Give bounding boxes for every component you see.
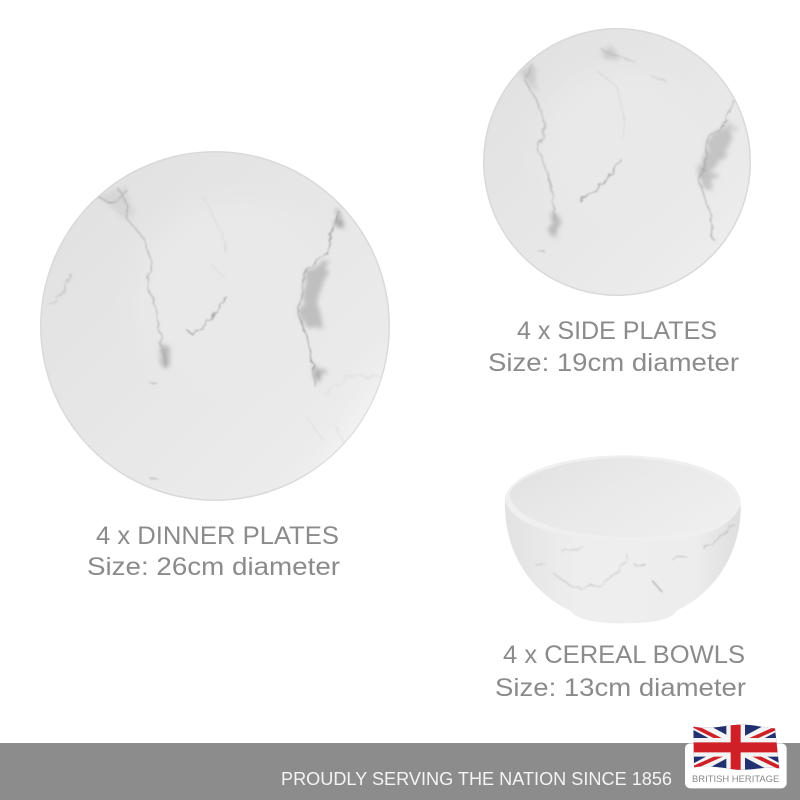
badge: british heritage flag: BRITISH HERITAGE bbox=[692, 774, 779, 784]
dinner plate bbox=[40, 151, 395, 510]
label: dinner plates: 4 x DINNER PLATES bbox=[96, 522, 339, 550]
footer slogan: PROUDLY SERVING THE NATION SINCE 1856 bbox=[281, 769, 672, 789]
label: side plates bbox=[488, 317, 739, 377]
label: side plates: 4 x SIDE PLATES bbox=[517, 317, 717, 345]
label: dinner plates bbox=[87, 522, 340, 581]
badge: british heritage flag bbox=[685, 722, 787, 788]
label: dinner plates: Size: 26cm diameter bbox=[87, 553, 340, 581]
label: cereal bowls: Size: 13cm diameter bbox=[495, 674, 746, 702]
label: side plates: Size: 19cm diameter bbox=[488, 349, 739, 377]
label: cereal bowls: 4 x CEREAL BOWLS bbox=[503, 641, 745, 669]
footer bar bbox=[0, 743, 800, 800]
cereal bowl bbox=[505, 455, 741, 623]
side plate bbox=[483, 28, 751, 296]
label: cereal bowls bbox=[495, 641, 746, 702]
icon: union flag bbox=[693, 724, 780, 770]
